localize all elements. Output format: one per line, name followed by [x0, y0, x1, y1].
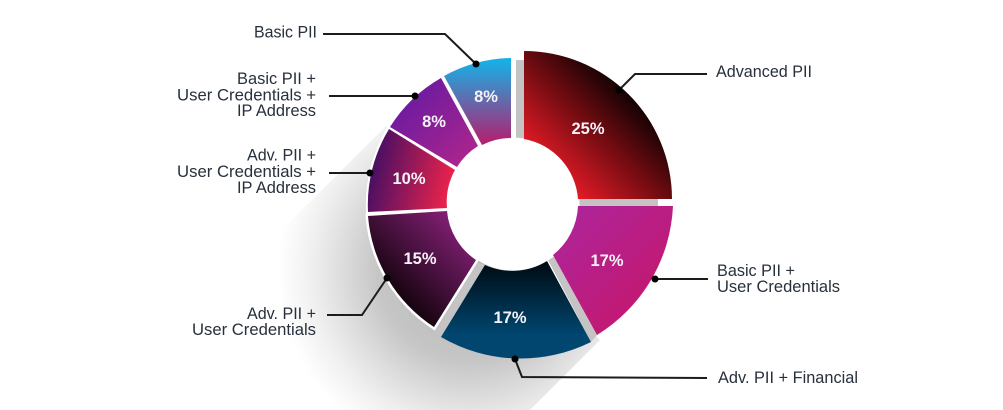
segment: Advanced PII 25%	[524, 51, 672, 199]
segment: Adv. PII + User Credentials 15%	[368, 211, 476, 327]
label: Advanced PII: Advanced PII	[716, 62, 812, 81]
leader: Basic PII + User Credentials + IP Address	[329, 92, 418, 100]
segment: Basic PII + User Credentials 17%	[553, 206, 673, 335]
label: Adv. PII + Financial: Adv. PII + Financial	[718, 368, 858, 387]
label: Adv. PII + User Credentials + IP Address: IP Address	[237, 178, 316, 197]
segment: Basic PII + User Credentials + IP Address 8%	[390, 78, 478, 167]
label: Adv. PII + User Credentials + IP Address	[177, 146, 316, 197]
label: Basic PII + User Credentials + IP Address: IP Address	[237, 101, 316, 120]
leader: Adv. PII + User Credentials + IP Address	[329, 170, 374, 176]
label: Adv. PII + User Credentials: User Credentials	[192, 320, 316, 339]
label: Adv. PII + User Credentials + IP Address: User Credentials +	[177, 162, 316, 181]
grey gap strips	[437, 60, 658, 342]
label: Basic PII: Basic PII	[254, 22, 317, 42]
label: Basic PII + User Credentials + IP Address	[177, 69, 316, 120]
label: Basic PII + User Credentials + IP Address: User Credentials +	[177, 86, 316, 104]
value: 10%: 10%	[392, 170, 426, 188]
long drop shadow	[240, 126, 600, 410]
label: Basic PII + User Credentials: Basic PII +	[717, 261, 795, 280]
value: 25%: 25%	[571, 120, 605, 138]
segment: Basic PII 8%	[444, 58, 511, 145]
label: Adv. PII + User Credentials	[192, 304, 316, 339]
leader: Adv. PII + Financial	[512, 356, 707, 378]
leader: Adv. PII + User Credentials	[327, 274, 390, 315]
segment: Adv. PII + User Credentials + IP Address 10%	[368, 129, 455, 212]
label: Basic PII + User Credentials + IP Address: Basic PII +	[237, 69, 316, 88]
value: 17% navy: 17%	[493, 309, 527, 327]
value: 17% magenta: 17%	[590, 252, 624, 270]
value: 8% blue: 8%	[474, 88, 498, 106]
leader: Basic PII	[323, 34, 480, 68]
segment: Adv. PII + Financial 17%	[441, 261, 591, 359]
leader: Basic PII + User Credentials	[652, 276, 708, 282]
label: Adv. PII + User Credentials + IP Address: Adv. PII +	[247, 146, 316, 164]
value: 8% purple: 8%	[422, 113, 446, 131]
label: Adv. PII + User Credentials: Adv. PII +	[247, 304, 316, 323]
donut hole	[446, 138, 580, 270]
label: Basic PII + User Credentials: User Credentials	[717, 277, 840, 296]
label: Basic PII + User Credentials	[717, 261, 840, 296]
value: 15%: 15%	[403, 250, 437, 268]
leader: Advanced PII	[616, 74, 707, 94]
